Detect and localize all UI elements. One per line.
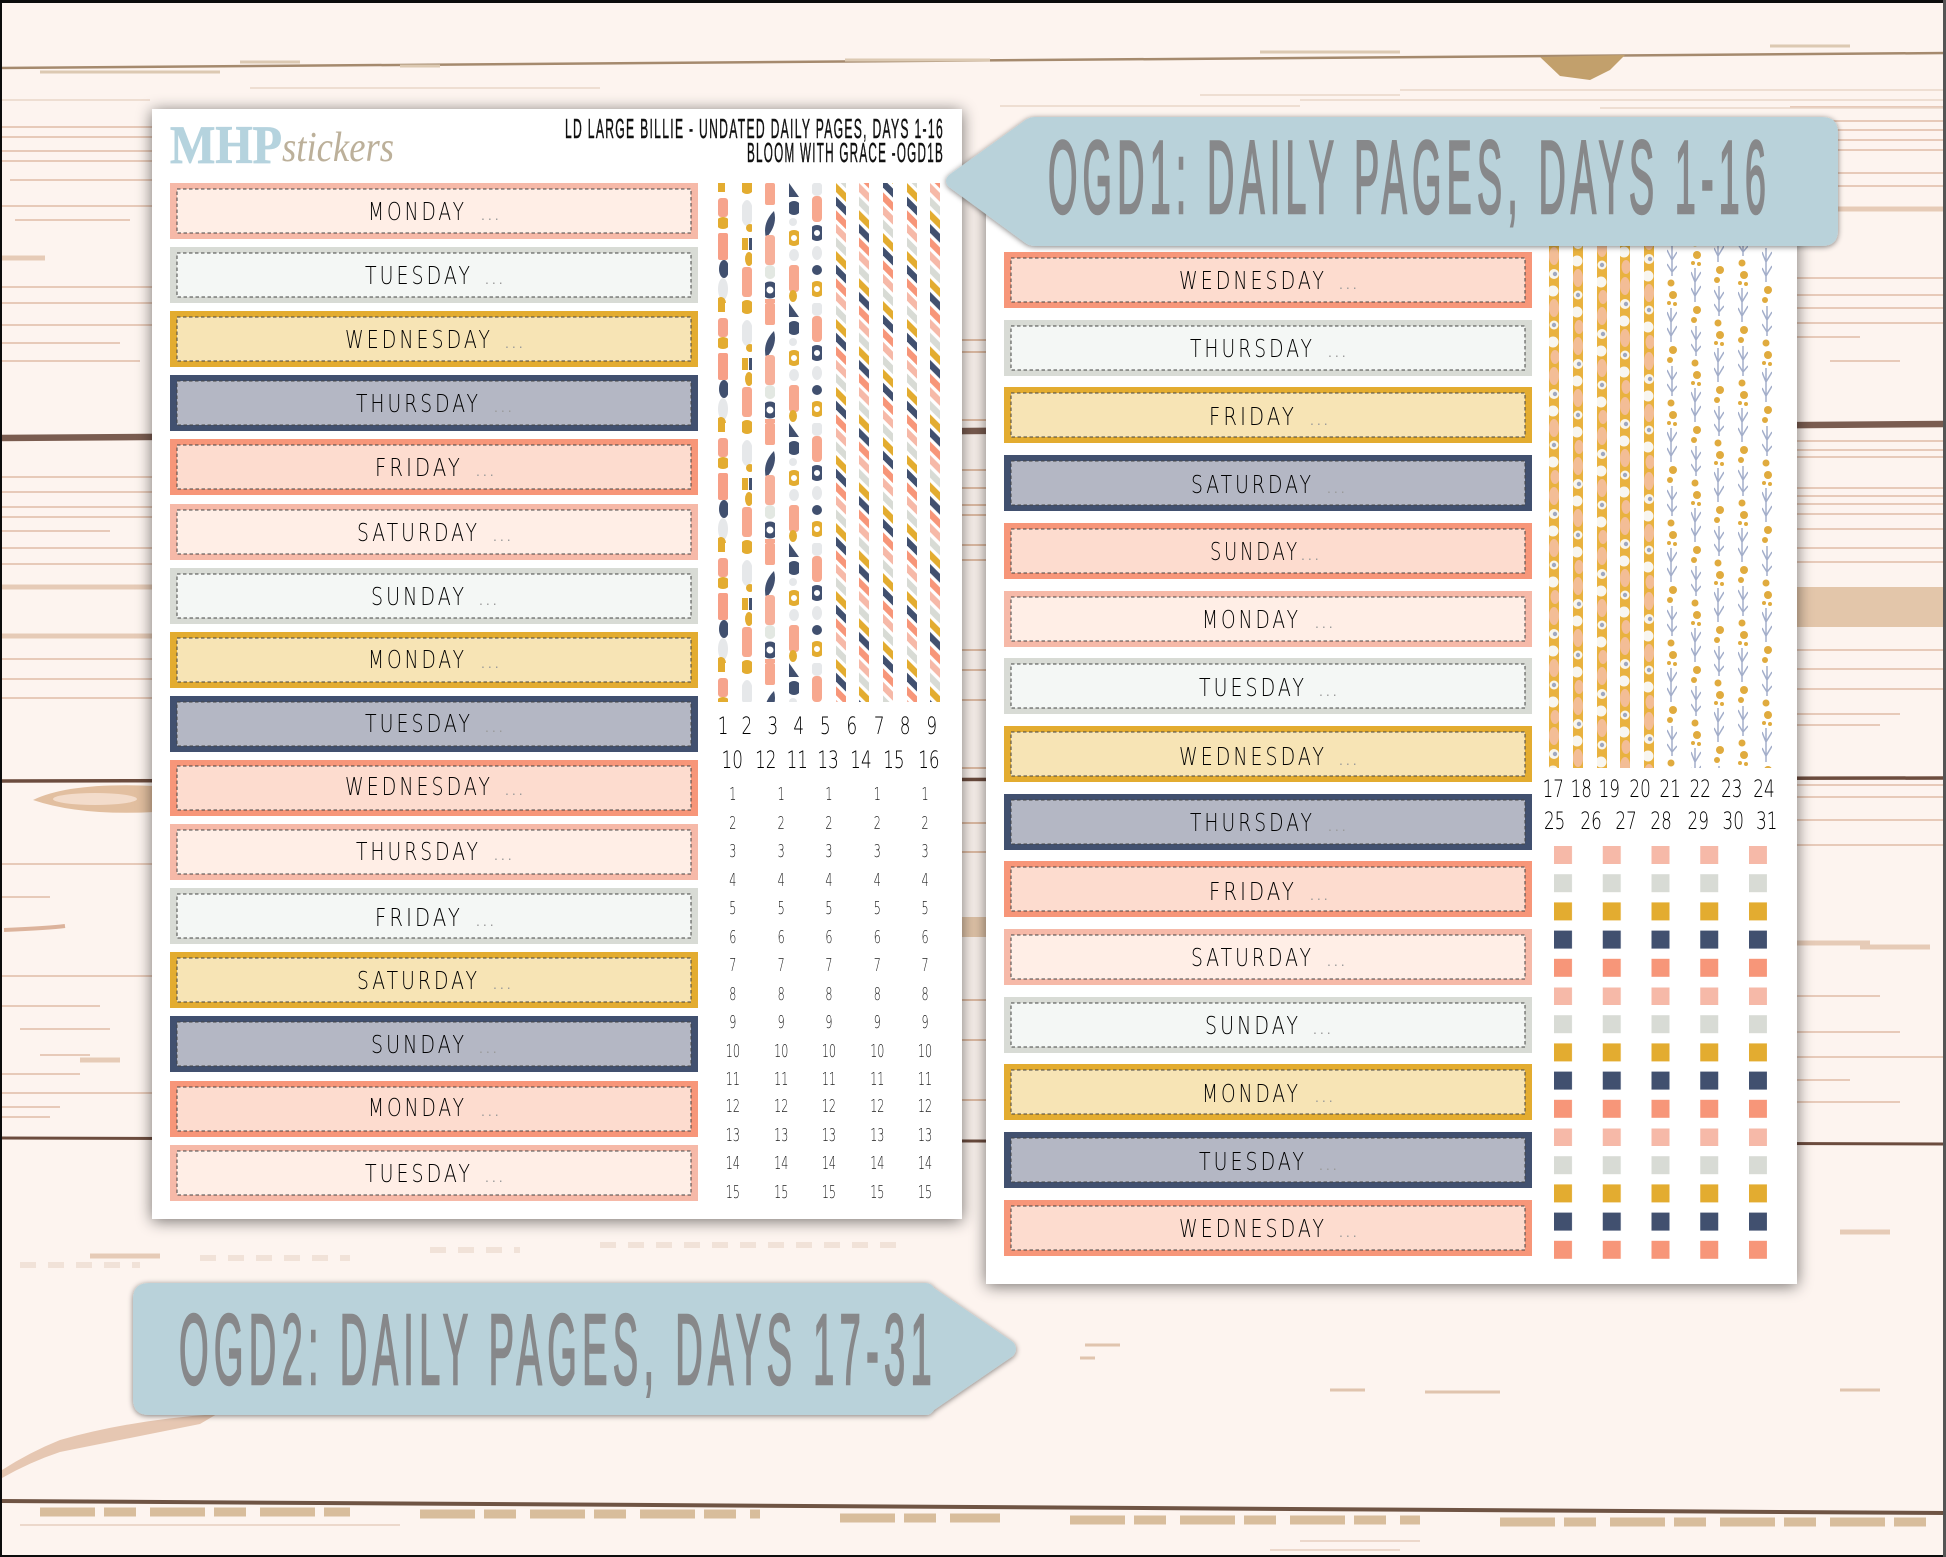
day numbers 1-16: 15 — [883, 746, 905, 774]
small number grid 1-15 in five columns: 15 — [726, 1181, 740, 1203]
small number grid 1-15 in five columns: 4 — [729, 869, 736, 891]
label: Friday coral: FRIDAY — [1209, 877, 1297, 906]
small number grid 1-15 in five columns: 9 — [729, 1011, 736, 1033]
day numbers 17-31: 27 — [1615, 807, 1637, 835]
label: Saturday mustard: ... — [493, 976, 514, 992]
small number grid 1-15 in five columns: 13 — [774, 1124, 788, 1146]
small number grid 1-15 in five columns: 14 — [870, 1152, 884, 1174]
small number grid 1-15 in five columns: 11 — [918, 1068, 932, 1090]
day numbers 17-31: 28 — [1650, 807, 1672, 835]
washi strips: mustard floral and twig pattern — [1549, 246, 1772, 768]
day numbers 17-31: 18 — [1571, 775, 1592, 803]
label: Tuesday navy: TUESDAY — [365, 709, 473, 738]
small number grid 1-15 in five columns: 11 — [870, 1068, 884, 1090]
small number grid 1-15 in five columns: 12 — [822, 1095, 836, 1117]
label: Sunday grey: SUNDAY — [371, 582, 467, 611]
label: Tuesday grey — [170, 247, 698, 303]
small number grid 1-15 in five columns: 11 — [822, 1068, 836, 1090]
small number grid 1-15 in five columns: 7 — [921, 954, 929, 976]
label: Monday peach: ... — [481, 207, 502, 223]
label: Wednesday mustard: ... — [1339, 752, 1360, 768]
label: Sunday navy — [170, 1016, 698, 1072]
label: Monday peach — [170, 183, 698, 239]
label: Sunday grey — [1004, 997, 1532, 1053]
label: Wednesday mustard: ... — [505, 335, 526, 351]
label: Sunday grey: SUNDAY — [1205, 1011, 1301, 1040]
label: Friday mustard — [1004, 387, 1532, 443]
label: Monday mustard: MONDAY — [368, 645, 467, 674]
small number grid 1-15 in five columns: 7 — [778, 954, 785, 976]
label: Friday grey: ... — [476, 913, 497, 929]
small number grid 1-15 in five columns: 4 — [825, 869, 832, 891]
label: Thursday peach: ... — [494, 847, 515, 863]
small number grid 1-15 in five columns: 4 — [874, 869, 881, 891]
banner arrow: OGD2 daily pages days 17-31 — [133, 1283, 1016, 1415]
label: Saturday peach: ... — [493, 528, 514, 544]
label: Thursday peach: THURSDAY — [356, 837, 481, 866]
small number grid 1-15 in five columns: 7 — [825, 954, 832, 976]
small number grid 1-15 in five columns: 10 — [918, 1040, 932, 1062]
small number grid 1-15 in five columns: 5 — [921, 897, 929, 919]
small number grid 1-15 in five columns: 12 — [726, 1095, 740, 1117]
small number grid 1-15 in five columns: 13 — [726, 1124, 740, 1146]
label: Friday mustard: FRIDAY — [1209, 402, 1297, 431]
small number grid 1-15 in five columns: 13 — [822, 1124, 836, 1146]
text: LD LARGE BILLIE - UNDATED DAILY PAGES, DAYS 1-16 — [565, 113, 944, 144]
label: Friday coral — [1004, 861, 1532, 917]
label: Tuesday navy: ... — [485, 719, 506, 735]
small number grid 1-15 in five columns: 10 — [726, 1040, 740, 1062]
small number grid 1-15 in five columns: 3 — [778, 840, 785, 862]
logo: MHP stickers: MHP — [170, 115, 282, 175]
label: Wednesday mustard — [1004, 726, 1532, 782]
small number grid 1-15 in five columns: 14 — [774, 1152, 788, 1174]
label: Tuesday grey — [1004, 658, 1532, 714]
label: Sunday grey — [170, 568, 698, 624]
label: Tuesday grey: TUESDAY — [1199, 673, 1307, 702]
small number grid 1-15 in five columns: 2 — [825, 812, 832, 834]
day numbers 17-31: 31 — [1756, 807, 1777, 835]
label: Thursday grey — [1004, 320, 1532, 376]
small number grid 1-15 in five columns: 5 — [729, 897, 736, 919]
text: BLOOM WITH GRACE -OGD1B — [747, 137, 944, 168]
small number grid 1-15 in five columns: 3 — [729, 840, 736, 862]
label: Monday coral: MONDAY — [368, 1093, 467, 1122]
small number grid 1-15 in five columns: 8 — [921, 983, 929, 1005]
label: Sunday navy: ... — [479, 1040, 500, 1056]
day numbers 17-31: 23 — [1721, 775, 1742, 803]
label: Thursday navy: ... — [1328, 818, 1349, 834]
small number grid 1-15 in five columns: 1 — [729, 783, 736, 805]
label: Monday peach: ... — [1315, 615, 1336, 631]
label: Thursday navy — [170, 375, 698, 431]
small number grid 1-15 in five columns: 4 — [921, 869, 929, 891]
label: Sunday grey: ... — [1313, 1021, 1334, 1037]
label: Thursday grey: THURSDAY — [1190, 334, 1315, 363]
day numbers 1-16: 16 — [918, 746, 940, 774]
day numbers 1-16: 1 — [718, 712, 728, 740]
label: Monday coral: ... — [481, 1103, 502, 1119]
washi strips: floral and diagonal stripes — [718, 183, 940, 702]
small number grid 1-15 in five columns: 4 — [778, 869, 785, 891]
label: Tuesday navy: ... — [1319, 1157, 1340, 1173]
day numbers 1-16: 3 — [767, 712, 778, 740]
day numbers 17-31: 29 — [1688, 807, 1709, 835]
label: Saturday navy — [1004, 455, 1532, 511]
small number grid 1-15 in five columns: 9 — [778, 1011, 785, 1033]
label: Sunday grey: ... — [479, 592, 500, 608]
label: Friday grey — [170, 888, 698, 944]
label: Sunday coral: SUNDAY — [1210, 537, 1300, 566]
day numbers 1-16: 11 — [787, 746, 808, 774]
day numbers 17-31: 19 — [1599, 775, 1620, 803]
day numbers 1-16: 12 — [755, 746, 776, 774]
label: Saturday navy: ... — [1327, 480, 1348, 496]
small number grid 1-15 in five columns: 8 — [825, 983, 832, 1005]
label: Wednesday coral: WEDNESDAY — [1179, 1214, 1327, 1243]
small number grid 1-15 in five columns: 13 — [870, 1124, 884, 1146]
small number grid 1-15 in five columns: 5 — [874, 897, 881, 919]
day numbers 17-31: 25 — [1544, 807, 1565, 835]
small number grid 1-15 in five columns: 11 — [774, 1068, 788, 1090]
small number grid 1-15 in five columns: 10 — [774, 1040, 788, 1062]
colour square grid — [1554, 846, 1767, 1260]
label: Saturday peach — [170, 504, 698, 560]
label: Thursday peach — [170, 824, 698, 880]
label: Friday coral: FRIDAY — [375, 453, 463, 482]
small number grid 1-15 in five columns: 14 — [918, 1152, 932, 1174]
small number grid 1-15 in five columns: 12 — [774, 1095, 788, 1117]
sticker sheet: OGD2 days 17-31 — [986, 173, 1797, 1284]
day numbers 17-31 — [1543, 775, 1777, 835]
small number grid 1-15 in five columns: 8 — [778, 983, 785, 1005]
small number grid 1-15 in five columns: 2 — [874, 812, 881, 834]
day numbers 1-16: 7 — [874, 712, 885, 740]
day numbers 1-16: 4 — [793, 712, 804, 740]
day numbers 17-31: 22 — [1690, 775, 1711, 803]
small number grid 1-15 in five columns: 6 — [825, 926, 832, 948]
label: Wednesday coral: ... — [505, 782, 526, 798]
label: Monday mustard: ... — [1315, 1089, 1336, 1105]
label: Saturday peach: ... — [1327, 953, 1348, 969]
small number grid 1-15 in five columns: 14 — [822, 1152, 836, 1174]
label: Sunday coral — [1004, 523, 1532, 579]
label: Monday peach — [1004, 591, 1532, 647]
small number grid 1-15 in five columns — [726, 783, 932, 1203]
label: Wednesday coral: WEDNESDAY — [1179, 266, 1327, 295]
label: Monday mustard: ... — [481, 655, 502, 671]
small number grid 1-15 in five columns: 2 — [778, 812, 785, 834]
small number grid 1-15 in five columns: 14 — [726, 1152, 740, 1174]
small number grid 1-15 in five columns: 5 — [825, 897, 832, 919]
small number grid 1-15 in five columns: 15 — [822, 1181, 836, 1203]
logo: MHP stickers: stickers — [282, 125, 394, 171]
label: Wednesday coral: ... — [1339, 1224, 1360, 1240]
day numbers 1-16 — [718, 712, 940, 774]
label: Tuesday peach: ... — [485, 1169, 506, 1185]
label: Monday peach: MONDAY — [368, 197, 467, 226]
label: Tuesday navy: TUESDAY — [1199, 1147, 1307, 1176]
small number grid 1-15 in five columns: 3 — [921, 840, 929, 862]
label: Thursday navy — [1004, 794, 1532, 850]
small number grid 1-15 in five columns: 7 — [729, 954, 736, 976]
small number grid 1-15 in five columns: 9 — [874, 1011, 881, 1033]
day numbers 17-31: 17 — [1543, 775, 1564, 803]
label: Monday mustard: MONDAY — [1202, 1079, 1301, 1108]
small number grid 1-15 in five columns: 15 — [774, 1181, 788, 1203]
label: Monday mustard — [1004, 1064, 1532, 1120]
small number grid 1-15 in five columns: 15 — [918, 1181, 932, 1203]
day numbers 1-16: 5 — [820, 712, 831, 740]
small number grid 1-15 in five columns: 10 — [822, 1040, 836, 1062]
day numbers 17-31: 20 — [1629, 775, 1651, 803]
label: Thursday navy: THURSDAY — [356, 389, 481, 418]
day numbers 1-16: 2 — [742, 712, 752, 740]
day numbers 1-16: 8 — [900, 712, 910, 740]
small number grid 1-15 in five columns: 8 — [729, 983, 736, 1005]
small number grid 1-15 in five columns: 1 — [921, 783, 929, 805]
logo: MHP stickers — [170, 115, 394, 175]
label: Tuesday peach — [170, 1145, 698, 1201]
label: Monday peach: MONDAY — [1202, 605, 1301, 634]
day numbers 17-31: 24 — [1753, 775, 1775, 803]
label: Saturday peach: SATURDAY — [357, 518, 480, 547]
label: Wednesday mustard — [170, 311, 698, 367]
small number grid 1-15 in five columns: 1 — [874, 783, 881, 805]
label: Saturday mustard: SATURDAY — [357, 966, 480, 995]
small number grid 1-15 in five columns: 3 — [874, 840, 881, 862]
label: Thursday navy: ... — [494, 399, 515, 415]
day numbers 17-31: 21 — [1660, 775, 1681, 803]
label: Friday grey: FRIDAY — [375, 903, 463, 932]
small number grid 1-15 in five columns: 10 — [870, 1040, 884, 1062]
small number grid 1-15 in five columns: 1 — [778, 783, 785, 805]
label: Saturday peach: SATURDAY — [1191, 943, 1314, 972]
label: Tuesday grey: TUESDAY — [365, 261, 473, 290]
label: Wednesday mustard: WEDNESDAY — [345, 325, 493, 354]
label: Tuesday grey: ... — [1319, 683, 1340, 699]
label: Monday coral — [170, 1081, 698, 1137]
label: Tuesday peach: TUESDAY — [365, 1159, 473, 1188]
day numbers 17-31: 26 — [1580, 807, 1602, 835]
small number grid 1-15 in five columns: 12 — [870, 1095, 884, 1117]
small number grid 1-15 in five columns: 6 — [921, 926, 929, 948]
day numbers 1-16: 13 — [817, 746, 839, 774]
label: Thursday grey: ... — [1328, 344, 1349, 360]
small number grid 1-15 in five columns: 9 — [921, 1011, 929, 1033]
label: Tuesday navy — [170, 696, 698, 752]
label: Friday coral — [170, 439, 698, 495]
day numbers 1-16: 6 — [847, 712, 857, 740]
small number grid 1-15 in five columns: 5 — [778, 897, 785, 919]
label: Sunday coral: ... — [1301, 547, 1322, 563]
small number grid 1-15 in five columns: 2 — [921, 812, 929, 834]
day numbers 17-31: 30 — [1723, 807, 1744, 835]
label: Wednesday coral — [1004, 252, 1532, 308]
small number grid 1-15 in five columns: 3 — [825, 840, 832, 862]
label: Wednesday mustard: WEDNESDAY — [1179, 742, 1327, 771]
label: Sunday navy: SUNDAY — [371, 1030, 467, 1059]
day numbers 1-16: 14 — [850, 746, 872, 774]
small number grid 1-15 in five columns: 11 — [726, 1068, 740, 1090]
label: Monday mustard — [170, 632, 698, 688]
sheet title — [565, 113, 944, 168]
sticker sheet: OGD1 days 1-16 — [152, 109, 962, 1219]
label: Wednesday coral: WEDNESDAY — [345, 772, 493, 801]
label: Tuesday grey: ... — [485, 271, 506, 287]
label: Wednesday coral: ... — [1339, 276, 1360, 292]
label: Friday coral: ... — [476, 463, 497, 479]
label: Thursday navy: THURSDAY — [1190, 808, 1315, 837]
small number grid 1-15 in five columns: 1 — [825, 783, 832, 805]
label: Friday coral: ... — [1310, 887, 1331, 903]
label: Saturday mustard — [170, 952, 698, 1008]
small number grid 1-15 in five columns: 8 — [874, 983, 881, 1005]
day numbers 1-16: 9 — [926, 712, 937, 740]
label: Friday mustard: ... — [1310, 412, 1331, 428]
label: Wednesday coral — [1004, 1200, 1532, 1256]
small number grid 1-15 in five columns: 6 — [778, 926, 785, 948]
small number grid 1-15 in five columns: 6 — [729, 926, 736, 948]
label: Saturday peach — [1004, 929, 1532, 985]
small number grid 1-15 in five columns: 15 — [870, 1181, 884, 1203]
small number grid 1-15 in five columns: 2 — [729, 812, 736, 834]
label: Wednesday coral — [170, 760, 698, 816]
label: Saturday navy: SATURDAY — [1191, 470, 1314, 499]
label: Tuesday navy — [1004, 1132, 1532, 1188]
day numbers 1-16: 10 — [722, 746, 743, 774]
small number grid 1-15 in five columns: 6 — [874, 926, 881, 948]
small number grid 1-15 in five columns: 9 — [825, 1011, 832, 1033]
small number grid 1-15 in five columns: 12 — [918, 1095, 932, 1117]
small number grid 1-15 in five columns: 7 — [874, 954, 881, 976]
small number grid 1-15 in five columns: 13 — [918, 1124, 932, 1146]
